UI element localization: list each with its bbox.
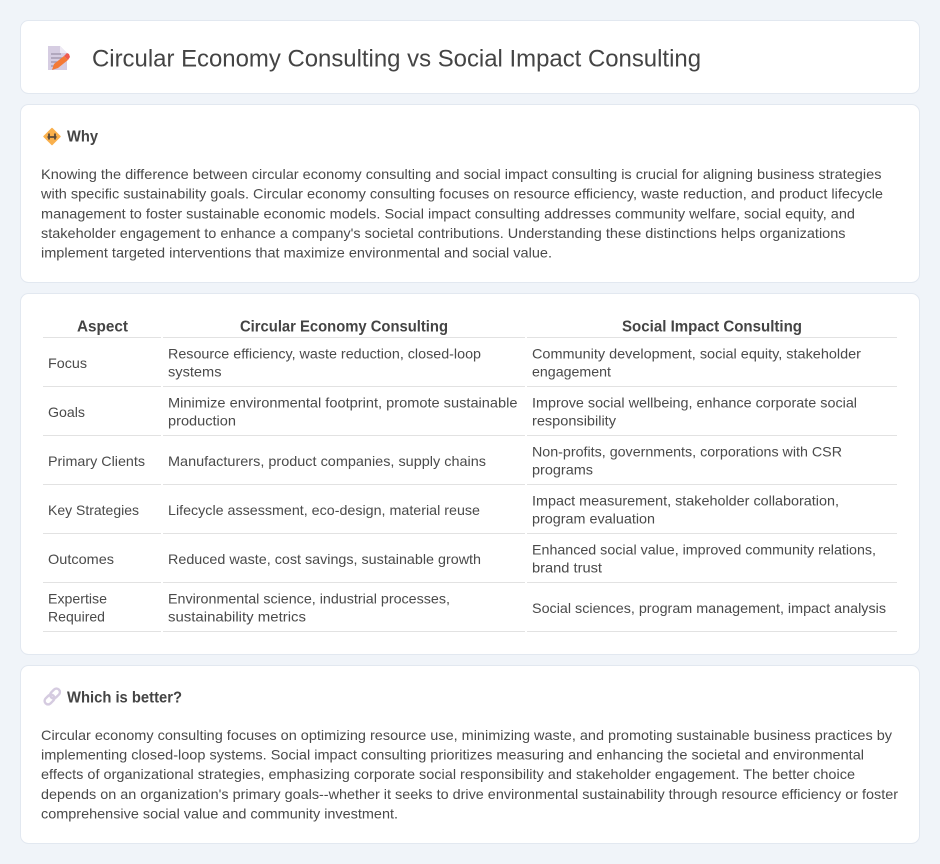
text block: which is better paragraph: implementing closed-loop systems. Social impact consulting prioritizes measuring and enhancing the societal and environmental — [41, 747, 864, 763]
table row: focus: Community development, social equity, stakeholder — [532, 346, 861, 362]
table header: Aspect — [77, 319, 129, 336]
table row: outcomes: Enhanced social value, improved community relations, — [532, 542, 876, 558]
table row: primary clients: Primary Clients — [48, 453, 145, 469]
table row: focus: Resource efficiency, waste reduction, closed-loop — [168, 346, 481, 362]
table row: goals: Goals — [48, 404, 85, 420]
table row: key strategies — [43, 492, 897, 534]
table row: primary clients: Non-profits, governments, corporations with CSR — [532, 444, 842, 460]
text block: which is better paragraph: Circular economy consulting focuses on optimizing resource use, minimizing waste, and promoting sustainable business practices by — [41, 727, 892, 743]
table row: focus — [43, 346, 897, 387]
heading: which is better: Which is better? — [67, 690, 182, 707]
table row: expertise required — [43, 590, 897, 632]
table row: expertise required: sustainability metrics — [168, 609, 306, 625]
title: Circular Economy Consulting vs Social Impact Consulting — [92, 46, 701, 72]
text block: why paragraph: implement targeted interventions that maximize environmental and social value. — [41, 245, 552, 261]
table header: Circular Economy Consulting — [240, 319, 448, 336]
text block: which is better paragraph: depends on an organization's primary goals--whether it seeks to drive environmental sustainability through resource efficiency or foster — [41, 786, 898, 802]
text block: why paragraph: stakeholder engagement to enhance a company's societal contributions. Understanding these distinctions helps organizations — [41, 225, 846, 241]
panel: which is better — [20, 666, 920, 844]
text block: why paragraph: Knowing the difference between circular economy consulting and social impact consulting is crucial for aligning business strategies — [41, 166, 881, 182]
table row: goals: responsibility — [532, 413, 616, 429]
text block: which is better paragraph: comprehensive social value and community investment. — [41, 805, 398, 821]
table row: goals: Improve social wellbeing, enhance corporate social — [532, 394, 857, 410]
panel: comparison table — [20, 294, 920, 654]
table row: key strategies: Key Strategies — [48, 502, 139, 518]
table row: goals: Minimize environmental footprint, promote sustainable — [168, 394, 518, 410]
table row: goals — [43, 394, 897, 436]
table row: key strategies: Impact measurement, stakeholder collaboration, — [532, 492, 839, 508]
table row: expertise required: Environmental science, industrial processes, — [168, 590, 450, 606]
panel: header — [20, 20, 920, 94]
panel: why — [20, 104, 920, 282]
table row: focus: Focus — [48, 355, 87, 371]
text block: which is better paragraph — [41, 727, 898, 821]
text block: which is better paragraph: effects of organizational strategies, emphasizing corporate social responsibility and stakeholder engagement. The better choice — [41, 766, 855, 782]
table row: primary clients: programs — [532, 462, 593, 478]
table row: key strategies: program evaluation — [532, 511, 655, 527]
table row: outcomes — [43, 542, 897, 583]
table header — [43, 319, 897, 338]
table row: outcomes: Reduced waste, cost savings, sustainable growth — [168, 551, 481, 567]
text block: why paragraph: management to foster sustainable economic models. Social impact consulting addresses community welfare, social equity, and — [41, 205, 855, 221]
icon: chain link — [43, 687, 61, 706]
table row: outcomes: brand trust — [532, 560, 602, 576]
table row: focus: systems — [168, 364, 222, 380]
text block: why paragraph — [40, 166, 883, 261]
table row: outcomes: Outcomes — [48, 551, 114, 567]
table row: key strategies: Lifecycle assessment, eco-design, material reuse — [168, 502, 480, 518]
table row: primary clients — [43, 444, 897, 485]
table row: focus: engagement — [532, 364, 611, 380]
table row: expertise required: Required — [48, 609, 105, 625]
table row: goals: production — [168, 413, 236, 429]
table row: primary clients: Manufacturers, product companies, supply chains — [168, 453, 486, 469]
table row: expertise required: Social sciences, program management, impact analysis — [532, 600, 886, 616]
table header: Social Impact Consulting — [622, 319, 802, 336]
heading: why: Why — [67, 129, 98, 146]
text block: why paragraph: with specific sustainability goals. Circular economy consulting focuses on resource efficiency, waste reduction, and product lifecycle — [40, 186, 883, 202]
icon: document with pencil — [48, 46, 70, 70]
icon: orange diamond sign — [44, 128, 60, 144]
table row: expertise required: Expertise — [48, 590, 107, 606]
